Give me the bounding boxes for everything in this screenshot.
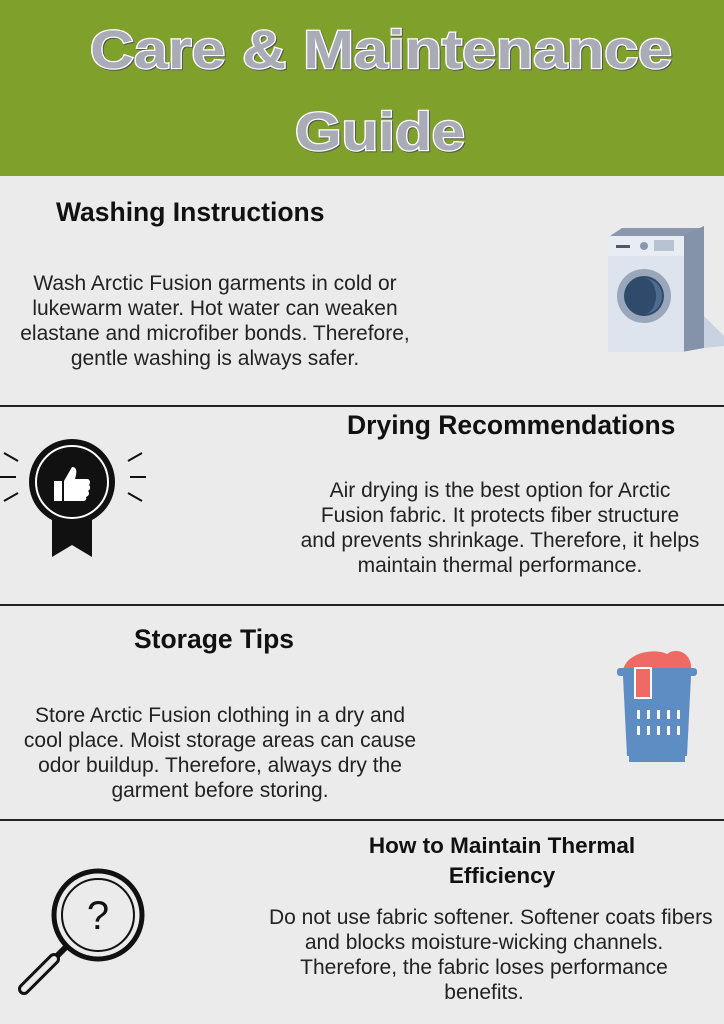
text: storage xyxy=(24,704,416,802)
heading: thermal: Efficiency xyxy=(449,863,555,888)
text: storage: Store Arctic Fusion clothing in a dry and xyxy=(35,704,405,727)
title: Guide xyxy=(295,102,465,162)
text: thermal: and blocks moisture-wicking channels. xyxy=(305,931,663,954)
section: washing xyxy=(20,197,724,370)
text: drying xyxy=(301,479,699,577)
heading: washing: Washing Instructions xyxy=(56,197,324,227)
title: Care & Maintenance xyxy=(90,20,672,80)
text: drying: Fusion fabric. It protects fiber structure xyxy=(321,504,679,527)
section: thermal efficiency xyxy=(18,833,713,1004)
text: thermal xyxy=(269,906,713,1004)
text: washing: elastane and microfiber bonds. Therefore, xyxy=(20,322,410,345)
icon: magnifying glass: ? xyxy=(87,894,109,938)
heading: thermal xyxy=(369,833,635,888)
text: drying: maintain thermal performance. xyxy=(358,554,642,577)
text: washing: lukewarm water. Hot water can weaken xyxy=(32,297,398,320)
text: washing: gentle washing is always safer. xyxy=(71,347,359,370)
text: washing: Wash Arctic Fusion garments in cold or xyxy=(33,272,397,295)
header banner xyxy=(0,0,724,176)
heading: thermal: How to Maintain Thermal xyxy=(369,833,635,858)
text: thermal: Therefore, the fabric loses performance xyxy=(300,956,668,979)
heading: storage: Storage Tips xyxy=(134,624,294,654)
icon: magnifying glass xyxy=(18,868,144,995)
section: drying xyxy=(0,410,699,577)
text: drying: and prevents shrinkage. Therefore, it helps xyxy=(301,529,699,552)
heading: drying: Drying Recommendations xyxy=(347,410,675,440)
section: storage xyxy=(24,624,697,802)
text: storage: odor buildup. Therefore, always dry the xyxy=(38,754,402,777)
icon: thumbs up badge xyxy=(0,439,146,557)
title xyxy=(90,20,672,162)
icon: washing machine xyxy=(608,226,724,352)
text: drying: Air drying is the best option for Arctic xyxy=(330,479,670,502)
text: storage: cool place. Moist storage areas can cause xyxy=(24,729,416,752)
text: storage: garment before storing. xyxy=(111,779,329,802)
text: thermal: benefits. xyxy=(444,981,524,1004)
text: thermal: Do not use fabric softener. Softener coats fibers xyxy=(269,906,713,929)
icon: laundry basket xyxy=(617,650,697,762)
text: washing xyxy=(20,272,410,370)
